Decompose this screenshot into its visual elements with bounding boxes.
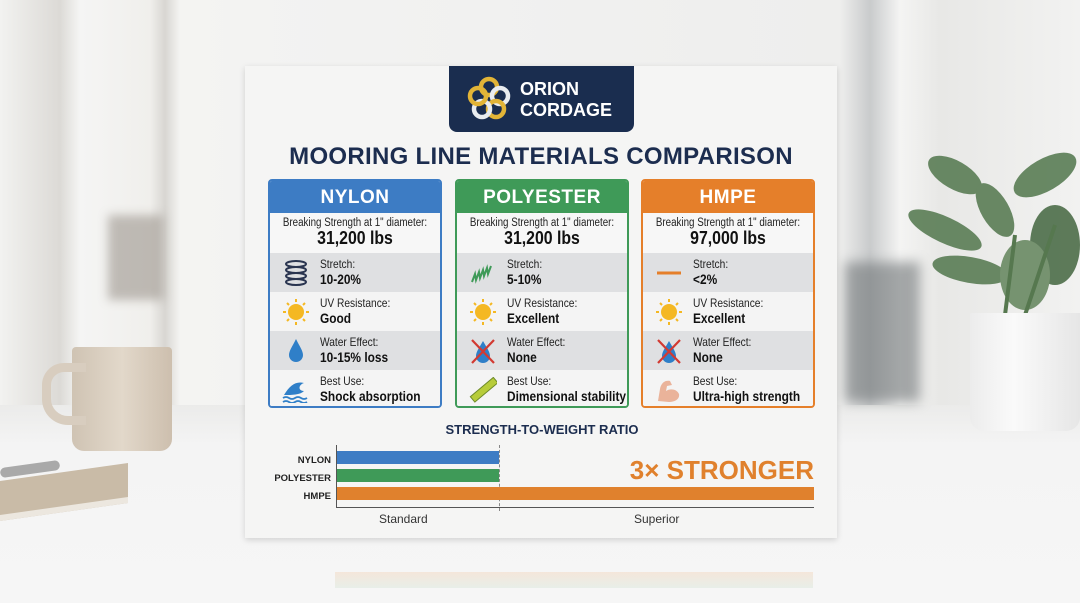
icon: sun: [283, 299, 309, 325]
panel: polyester: Excellent: [507, 310, 559, 326]
board reflection: [335, 572, 813, 588]
board: [245, 66, 837, 538]
panel: nylon: Best Use:: [320, 374, 364, 388]
mug: [42, 347, 172, 451]
panel: polyester: Breaking Strength at 1" diameter:: [470, 217, 614, 229]
panel: hmpe: Breaking Strength at 1" diameter:: [656, 217, 800, 229]
panel: polyester: 5-10%: [507, 271, 541, 287]
logo: [449, 66, 634, 132]
panel: nylon: 10-20%: [320, 271, 361, 287]
panel: hmpe: Stretch:: [693, 257, 728, 271]
panel: polyester: Dimensional stability: [507, 388, 626, 404]
panel: hmpe: 97,000 lbs: [690, 228, 766, 248]
bar: nylon: [337, 451, 499, 464]
panel: hmpe: HMPE: [700, 187, 756, 208]
panel: nylon: 10-15% loss: [320, 349, 388, 365]
panel: polyester: UV Resistance:: [507, 296, 577, 310]
panel: polyester: 31,200 lbs: [504, 228, 580, 248]
plant: [908, 152, 1080, 431]
panel: nylon: Stretch:: [320, 257, 355, 271]
icon: sun: [470, 299, 496, 325]
bar labels: NYLON: [298, 455, 331, 466]
panel: hmpe: Best Use:: [693, 374, 737, 388]
panel: polyester: [455, 179, 629, 408]
panel: nylon: 31,200 lbs: [317, 228, 393, 248]
chart title: STRENGTH-TO-WEIGHT RATIO: [445, 422, 639, 437]
icon: straight line: [657, 272, 681, 274]
panel: nylon: UV Resistance:: [320, 296, 390, 310]
icon: water drop: [289, 339, 303, 362]
panel: hmpe: <2%: [693, 271, 717, 287]
panel: polyester: Stretch:: [507, 257, 542, 271]
logo text: CORDAGE: [520, 100, 612, 120]
panel: nylon: Shock absorption: [320, 388, 420, 404]
icon: crossed water drop: [657, 339, 681, 364]
axis labels: Standard: [379, 512, 428, 526]
bar labels: POLYESTER: [274, 473, 331, 484]
panel: hmpe: Excellent: [693, 310, 745, 326]
panel: nylon: Good: [320, 310, 351, 326]
icon: wave: [282, 382, 308, 403]
title: MOORING LINE MATERIALS COMPARISON: [289, 143, 793, 170]
icon: ruler: [470, 377, 497, 403]
chart: strength-to-weight ratio: Superior: [634, 512, 679, 526]
panel: nylon: Water Effect:: [320, 335, 378, 349]
panel: nylon: Breaking Strength at 1" diameter:: [283, 217, 427, 229]
callout: 3x stronger: 3× STRONGER: [630, 455, 814, 485]
icon: spring coil: [285, 260, 307, 286]
icon: tight spring: [471, 264, 492, 284]
panel: hmpe: [641, 179, 815, 408]
panel: polyester: Best Use:: [507, 374, 551, 388]
bar: hmpe: [337, 487, 814, 500]
desk surface: [0, 405, 1080, 603]
panel: hmpe: Ultra-high strength: [693, 388, 800, 404]
bar labels: HMPE: [304, 491, 331, 502]
bar labels: [274, 455, 331, 502]
panel: nylon: [268, 179, 442, 408]
panel: hmpe: Water Effect:: [693, 335, 751, 349]
bar: polyester: [337, 469, 499, 482]
logo text: [520, 79, 612, 120]
panel: polyester: POLYESTER: [483, 187, 601, 208]
panel: hmpe: UV Resistance:: [693, 296, 763, 310]
icon: flexed arm: [658, 380, 680, 402]
icon: sun: [656, 299, 682, 325]
chart: strength-to-weight ratio: [274, 422, 814, 526]
panel: polyester: Water Effect:: [507, 335, 565, 349]
panel: nylon: NYLON: [320, 187, 390, 208]
logo text: ORION: [520, 79, 579, 99]
panel: hmpe: None: [693, 349, 723, 365]
icon: crossed water drop: [471, 339, 495, 364]
notebook: [0, 460, 128, 521]
icon: rope knot: [468, 76, 510, 120]
axis: [336, 445, 337, 507]
panel: polyester: None: [507, 349, 537, 365]
background dark furniture: [845, 262, 920, 402]
